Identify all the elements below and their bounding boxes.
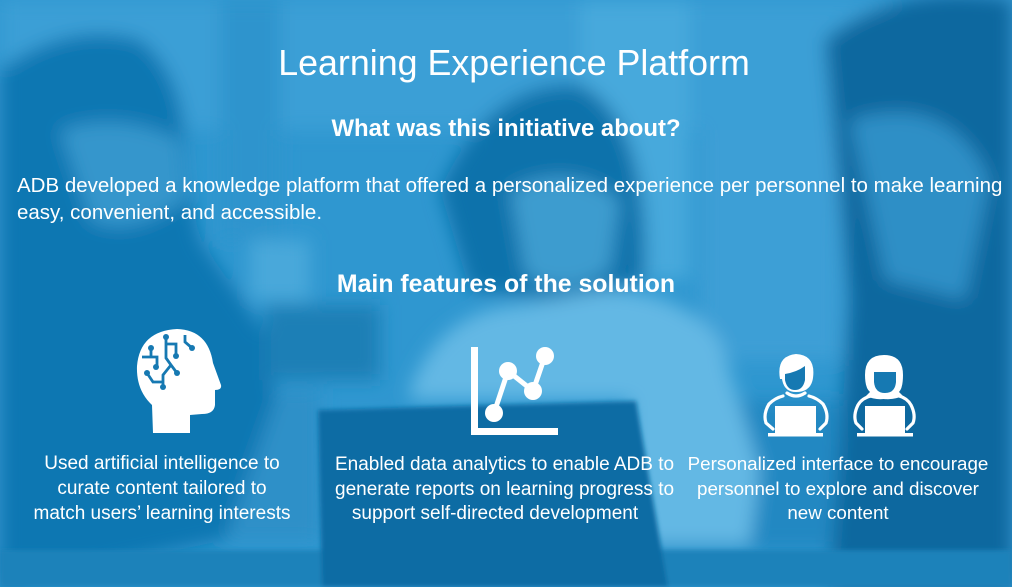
feature text: data analytics: support self-directed development	[352, 503, 638, 524]
feature text: data analytics	[335, 454, 674, 524]
title: Learning Experience Platform	[278, 43, 750, 83]
feature text: artificial intelligence	[34, 453, 290, 524]
description text: easy, convenient, and accessible.	[17, 201, 322, 224]
feature text: personalized interface: personnel to explore and discover	[697, 478, 979, 498]
feature text: artificial intelligence: Used artificial intelligence to	[44, 453, 280, 474]
feature text: personalized interface: Personalized interface to encourage	[688, 453, 988, 474]
description text: ADB developed a knowledge platform that offered a personalized experience per personnel to make learning	[17, 174, 1002, 197]
heading: what was this initiative about: What was this initiative about?	[331, 115, 681, 142]
feature text: artificial intelligence: match users’ learning interests	[34, 503, 290, 524]
feature text: personalized interface: new content	[787, 502, 889, 523]
heading: main features: Main features of the solution	[337, 271, 675, 298]
feature text: artificial intelligence: curate content tailored to	[57, 478, 267, 499]
feature text: data analytics: Enabled data analytics to enable ADB to	[335, 454, 674, 475]
feature text: data analytics: generate reports on learning progress to	[335, 478, 674, 500]
feature text: personalized interface	[688, 453, 988, 523]
description text	[17, 174, 1002, 224]
